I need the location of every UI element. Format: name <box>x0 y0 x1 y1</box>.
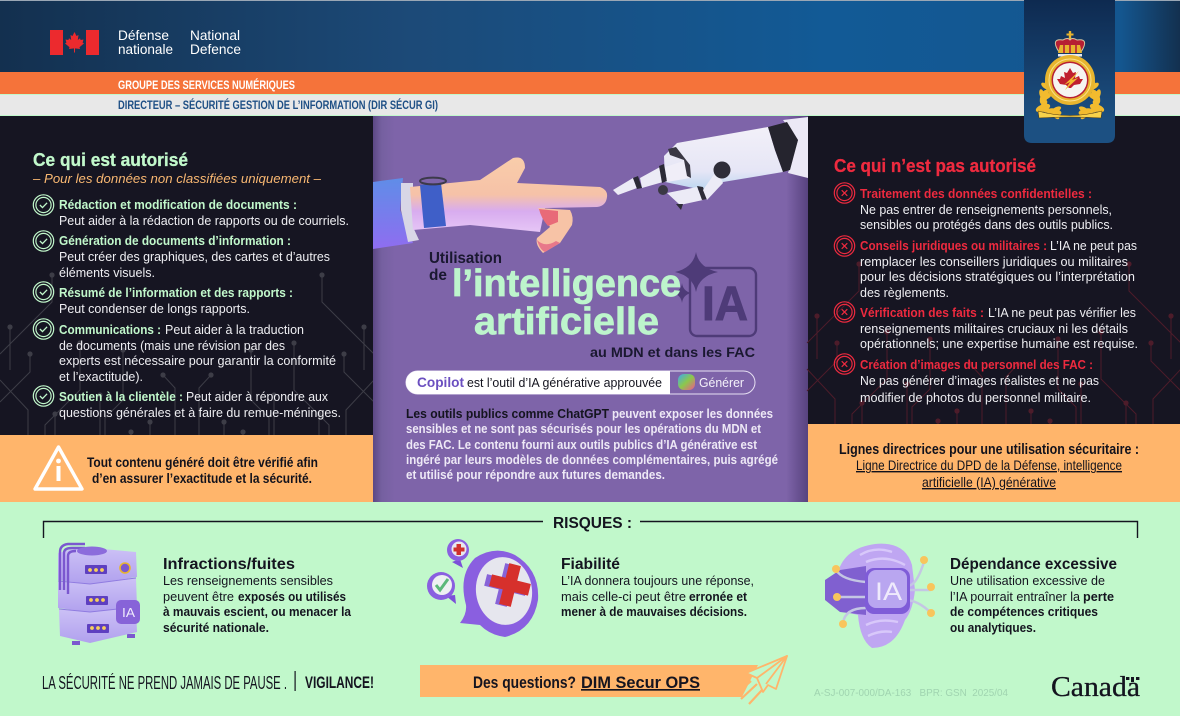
item: summaries: Peut condenser de longs rapports. <box>59 302 250 316</box>
item: fact checking: renseignements militaires cruciaux ni les détails <box>860 322 1128 336</box>
risk: overdependence: de compétences critiques <box>950 605 1098 619</box>
item: generating documents: Génération de documents d’information : <box>59 234 291 248</box>
risk: overdependence: ou analytiques. <box>950 621 1036 635</box>
panel: what is not allowed <box>807 116 1180 424</box>
text block: public tools warning: sensibles et ne sont pas sécurisés pour les opérations du MDN et <box>406 422 762 436</box>
heading: Utilisation de: Utilisation <box>429 250 502 267</box>
heading: allowed: Ce qui est autorisé <box>33 150 188 170</box>
icon: Copilot logo <box>678 374 695 390</box>
wordmark: Canada: Canada <box>1051 671 1140 703</box>
wordmark: Défense nationale: Défense <box>118 27 169 43</box>
grey band: directorate: DIRECTEUR – SÉCURITÉ GESTION DE L’INFORMATION (DIR SÉCUR GI) <box>118 99 438 112</box>
callout: Copilot pill: Générer <box>699 376 744 390</box>
heading: l'intelligence artificielle: artificielle <box>474 301 659 343</box>
item: images of personnel <box>834 354 1099 405</box>
callout: Copilot pill: est l’outil d’IA générative approuvée <box>467 376 662 390</box>
icon: paper plane <box>741 656 787 704</box>
risk: reliability: mais celle-ci peut être <box>561 590 686 604</box>
text block: public tools warning: ingéré par leurs modèles de données complémentaires, puis agrégé <box>406 453 778 467</box>
risk: reliability: mener à de mauvaises décisions. <box>561 605 747 619</box>
callout: guidelines <box>808 424 1180 502</box>
risk: reliability: erronée et <box>689 590 748 604</box>
item: client support <box>33 386 341 420</box>
call to action: questions: DIM Secur OPS <box>581 674 700 692</box>
wordmark: National Defence <box>190 27 241 57</box>
subheading: unclassified only: – Pour les données non classifiées uniquement – <box>32 172 322 186</box>
item: drafting: Peut aider à la rédaction de rapports ou de courriels. <box>59 214 349 228</box>
item: images of personnel: modifier de photos du personnel militaire. <box>860 391 1091 405</box>
icon: crown <box>1055 31 1085 56</box>
panel: what is allowed <box>0 116 374 435</box>
risk: overdependence <box>825 544 1117 648</box>
call to action: questions: Des questions? <box>473 674 576 692</box>
item: legal or military advice: L’IA ne peut pas <box>1050 239 1137 253</box>
text block: public tools warning: des FAC. Le contenu fourni aux outils publics d’IA générative est <box>406 438 758 452</box>
risk: overdependence: perte <box>1083 590 1114 604</box>
icon: badge <box>1033 55 1107 121</box>
risk: breaches <box>58 544 352 645</box>
wordmark: National Defence: National <box>190 27 240 43</box>
crest tab <box>1024 0 1115 143</box>
item: confidential data: Ne pas entrer de renseignements personnels, <box>860 203 1112 217</box>
item: legal or military advice: des règlements. <box>860 286 949 300</box>
risk: breaches: sécurité nationale. <box>163 621 269 635</box>
callout: Copilot pill <box>406 371 755 394</box>
heading: l'intelligence artificielle <box>452 263 681 343</box>
item: communications: Communications : <box>59 323 161 337</box>
risk: reliability <box>427 539 754 637</box>
risk: breaches: Les renseignements sensibles <box>163 574 333 588</box>
item: communications: et l’exactitude). <box>59 370 143 384</box>
document reference: A-SJ-007-000/DA-163 BPR: GSN 2025/04 <box>814 687 1008 699</box>
item: fact checking <box>834 302 1138 351</box>
risk: reliability: L’IA donnera toujours une réponse, <box>561 574 754 588</box>
heading: l'intelligence artificielle: l’intelligence <box>452 263 681 305</box>
slogan: VIGILANCE! <box>305 673 374 692</box>
callout: guidelines: Ligne Directrice du DPD de la Défense, intelligence <box>856 457 1122 473</box>
item: client support: Soutien à la clientèle : <box>59 390 183 404</box>
wordmark: National Defence: Defence <box>190 41 241 57</box>
item: legal or military advice: pour les décisions stratégiques ou l’interprétation <box>860 270 1135 284</box>
item: drafting: Rédaction et modification de documents : <box>59 198 297 212</box>
callout: verify generated content <box>0 435 373 502</box>
icon: IA sparkle <box>673 252 756 336</box>
icon: AI server: IA <box>122 605 135 620</box>
item: legal or military advice <box>834 236 1137 300</box>
callout: guidelines: artificielle (IA) générative <box>922 474 1056 490</box>
item: confidential data <box>834 183 1113 232</box>
wordmark: Défense nationale: nationale <box>118 41 173 57</box>
item: images of personnel: Ne pas générer d’images réalistes et ne pas <box>860 374 1099 388</box>
risk: breaches: Infractions/fuites <box>163 556 295 573</box>
item: generating documents: éléments visuels. <box>59 266 155 280</box>
item: generating documents <box>33 231 330 280</box>
illustration: human hand <box>373 157 607 253</box>
call to action: questions <box>420 656 787 704</box>
icon: AI server <box>58 544 140 645</box>
orange band: group name: GROUPE DES SERVICES NUMÉRIQUES <box>118 79 295 92</box>
item: summaries <box>33 282 293 316</box>
item: summaries: Résumé de l’information et des rapports : <box>59 286 293 300</box>
heading: not allowed: Ce qui n’est pas autorisé <box>834 156 1036 176</box>
grey band: directorate <box>0 95 1180 115</box>
icon: AI brain: IA <box>875 578 902 606</box>
callout: verify generated content: d’en assurer l’exactitude et la sécurité. <box>92 470 312 486</box>
illustration: robot hand <box>613 117 808 210</box>
text block: public tools warning: Les outils publics comme ChatGPT <box>406 407 609 421</box>
icon: Canadian flag <box>50 30 99 55</box>
risk: overdependence: Dépendance excessive <box>950 556 1117 573</box>
item: communications: Peut aider à la traduction <box>165 323 304 337</box>
icon: IA sparkle: IA <box>702 278 748 331</box>
item: images of personnel: Création d’images du personnel des FAC : <box>860 358 1093 372</box>
item: generating documents: Peut créer des graphiques, des cartes et d’autres <box>59 250 330 264</box>
item: confidential data: Traitement des données confidentielles : <box>860 187 1092 201</box>
item: drafting <box>33 195 349 228</box>
heading bracket: RISQUES: RISQUES : <box>553 515 632 532</box>
risk: breaches: exposés ou utilisés <box>238 590 346 604</box>
item: fact checking: opérationnels; une expertise humaine est requise. <box>860 337 1138 351</box>
item: communications: de documents (mais une révision par des <box>59 339 285 353</box>
item: confidential data: sensibles ou protégés dans des outils publics. <box>860 218 1113 232</box>
item: legal or military advice: remplacer les conseillers juridiques ou militaires <box>860 255 1128 269</box>
orange band: group name <box>0 72 1180 94</box>
risk: breaches: à mauvais escient, ou menacer la <box>163 605 352 619</box>
item: legal or military advice: Conseils juridiques ou militaires : <box>860 239 1047 253</box>
heading: Utilisation de <box>429 250 502 284</box>
subheading: au MDN et dans les FAC: au MDN et dans les FAC <box>590 344 755 360</box>
risk: reliability: Fiabilité <box>561 556 620 573</box>
item: client support: Peut aider à répondre aux <box>186 390 329 404</box>
icon: AI brain <box>825 544 935 648</box>
heading bracket: RISQUES <box>44 515 1138 538</box>
header banner <box>0 0 1180 115</box>
item: communications: experts est nécessaire pour garantir la conformité <box>59 354 336 368</box>
icon: speech bubble with cross <box>427 539 538 637</box>
wordmark: Défense nationale <box>118 27 173 57</box>
callout: Copilot pill: Copilot <box>417 374 464 390</box>
item: fact checking: Vérification des faits : <box>860 306 984 320</box>
item: client support: questions générales et à faire du remue-méninges. <box>59 406 341 420</box>
text block: public tools warning <box>406 407 778 482</box>
icon: warning triangle <box>35 447 82 489</box>
slogan: LA SÉCURITÉ NE PREND JAMAIS DE PAUSE . <box>42 673 287 693</box>
text block: public tools warning: peuvent exposer les données <box>612 407 773 421</box>
risk: overdependence: l’IA pourrait entraîner la <box>950 590 1080 604</box>
risk: breaches: peuvent être <box>163 590 234 604</box>
callout: verify generated content: Tout contenu généré doit être vérifié afin <box>87 454 318 470</box>
section: risks <box>44 515 1138 648</box>
item: fact checking: L’IA ne peut pas vérifier les <box>988 306 1136 320</box>
risk: overdependence: Une utilisation excessive de <box>950 574 1105 588</box>
text block: public tools warning: et utilisé pour répondre aux futures demandes. <box>406 468 665 482</box>
heading: Utilisation de: de <box>429 267 447 284</box>
item: communications <box>33 319 336 384</box>
panel: central title <box>373 116 808 502</box>
